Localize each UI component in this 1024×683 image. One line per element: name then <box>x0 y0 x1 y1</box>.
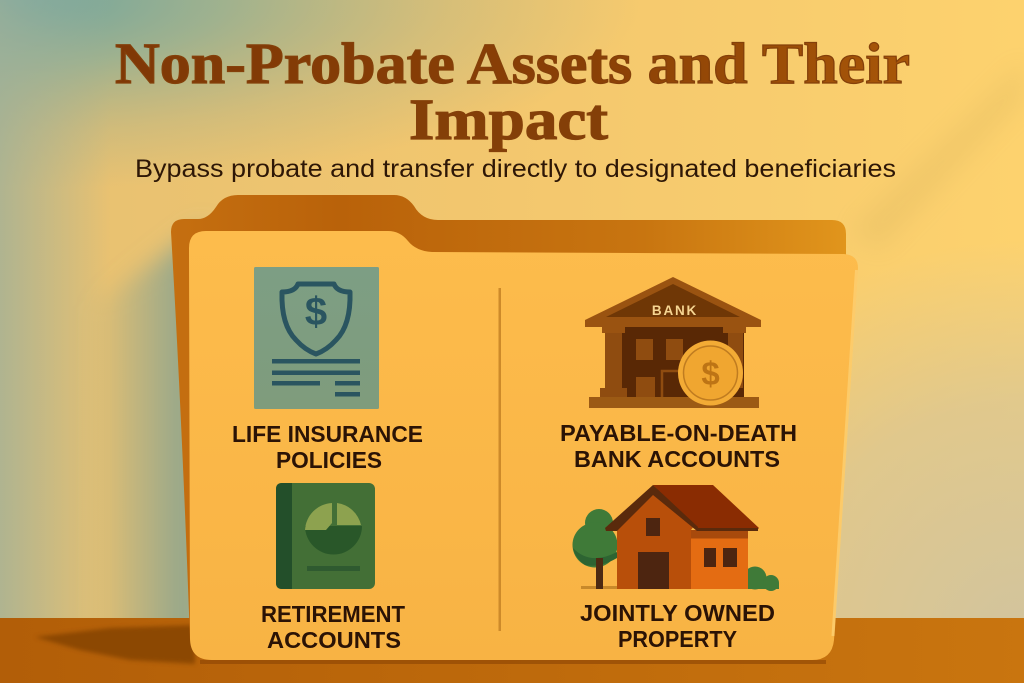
label: jointly owned: PROPERTY <box>618 626 737 652</box>
label: retirement accounts: RETIREMENT <box>261 601 406 627</box>
folder front <box>189 231 858 660</box>
icon: insurance policy: $ <box>305 290 327 334</box>
title: Impact <box>409 87 609 152</box>
bush <box>744 566 779 591</box>
label: retirement accounts: ACCOUNTS <box>267 627 401 653</box>
subtitle: Bypass probate and transfer directly to designated beneficiaries <box>135 155 896 183</box>
icon: retirement book <box>276 483 375 589</box>
tree <box>572 509 618 589</box>
ground <box>581 586 618 589</box>
folder back <box>171 195 846 640</box>
label: payable on death <box>560 420 797 472</box>
title: Non-Probate Assets and Their <box>115 31 910 96</box>
label: jointly owned <box>580 600 775 652</box>
title <box>115 31 910 152</box>
folder edges <box>200 660 826 664</box>
floor <box>0 618 1024 683</box>
coin: $ <box>701 355 720 392</box>
icon: bank <box>585 277 761 408</box>
label: payable on death: PAYABLE-ON-DEATH <box>560 420 797 446</box>
label: retirement accounts <box>261 601 406 653</box>
label: life insurance: LIFE INSURANCE <box>232 421 423 447</box>
label: life insurance <box>232 421 423 473</box>
folder <box>171 195 858 662</box>
label: payable on death: BANK ACCOUNTS <box>574 446 780 472</box>
label: life insurance: POLICIES <box>276 447 382 473</box>
divider <box>498 288 501 631</box>
icon: insurance policy <box>254 267 379 409</box>
label: jointly owned: JOINTLY OWNED <box>580 600 775 626</box>
icon: bank: BANK <box>652 303 698 318</box>
coin <box>678 340 743 406</box>
icon: house <box>572 485 779 591</box>
